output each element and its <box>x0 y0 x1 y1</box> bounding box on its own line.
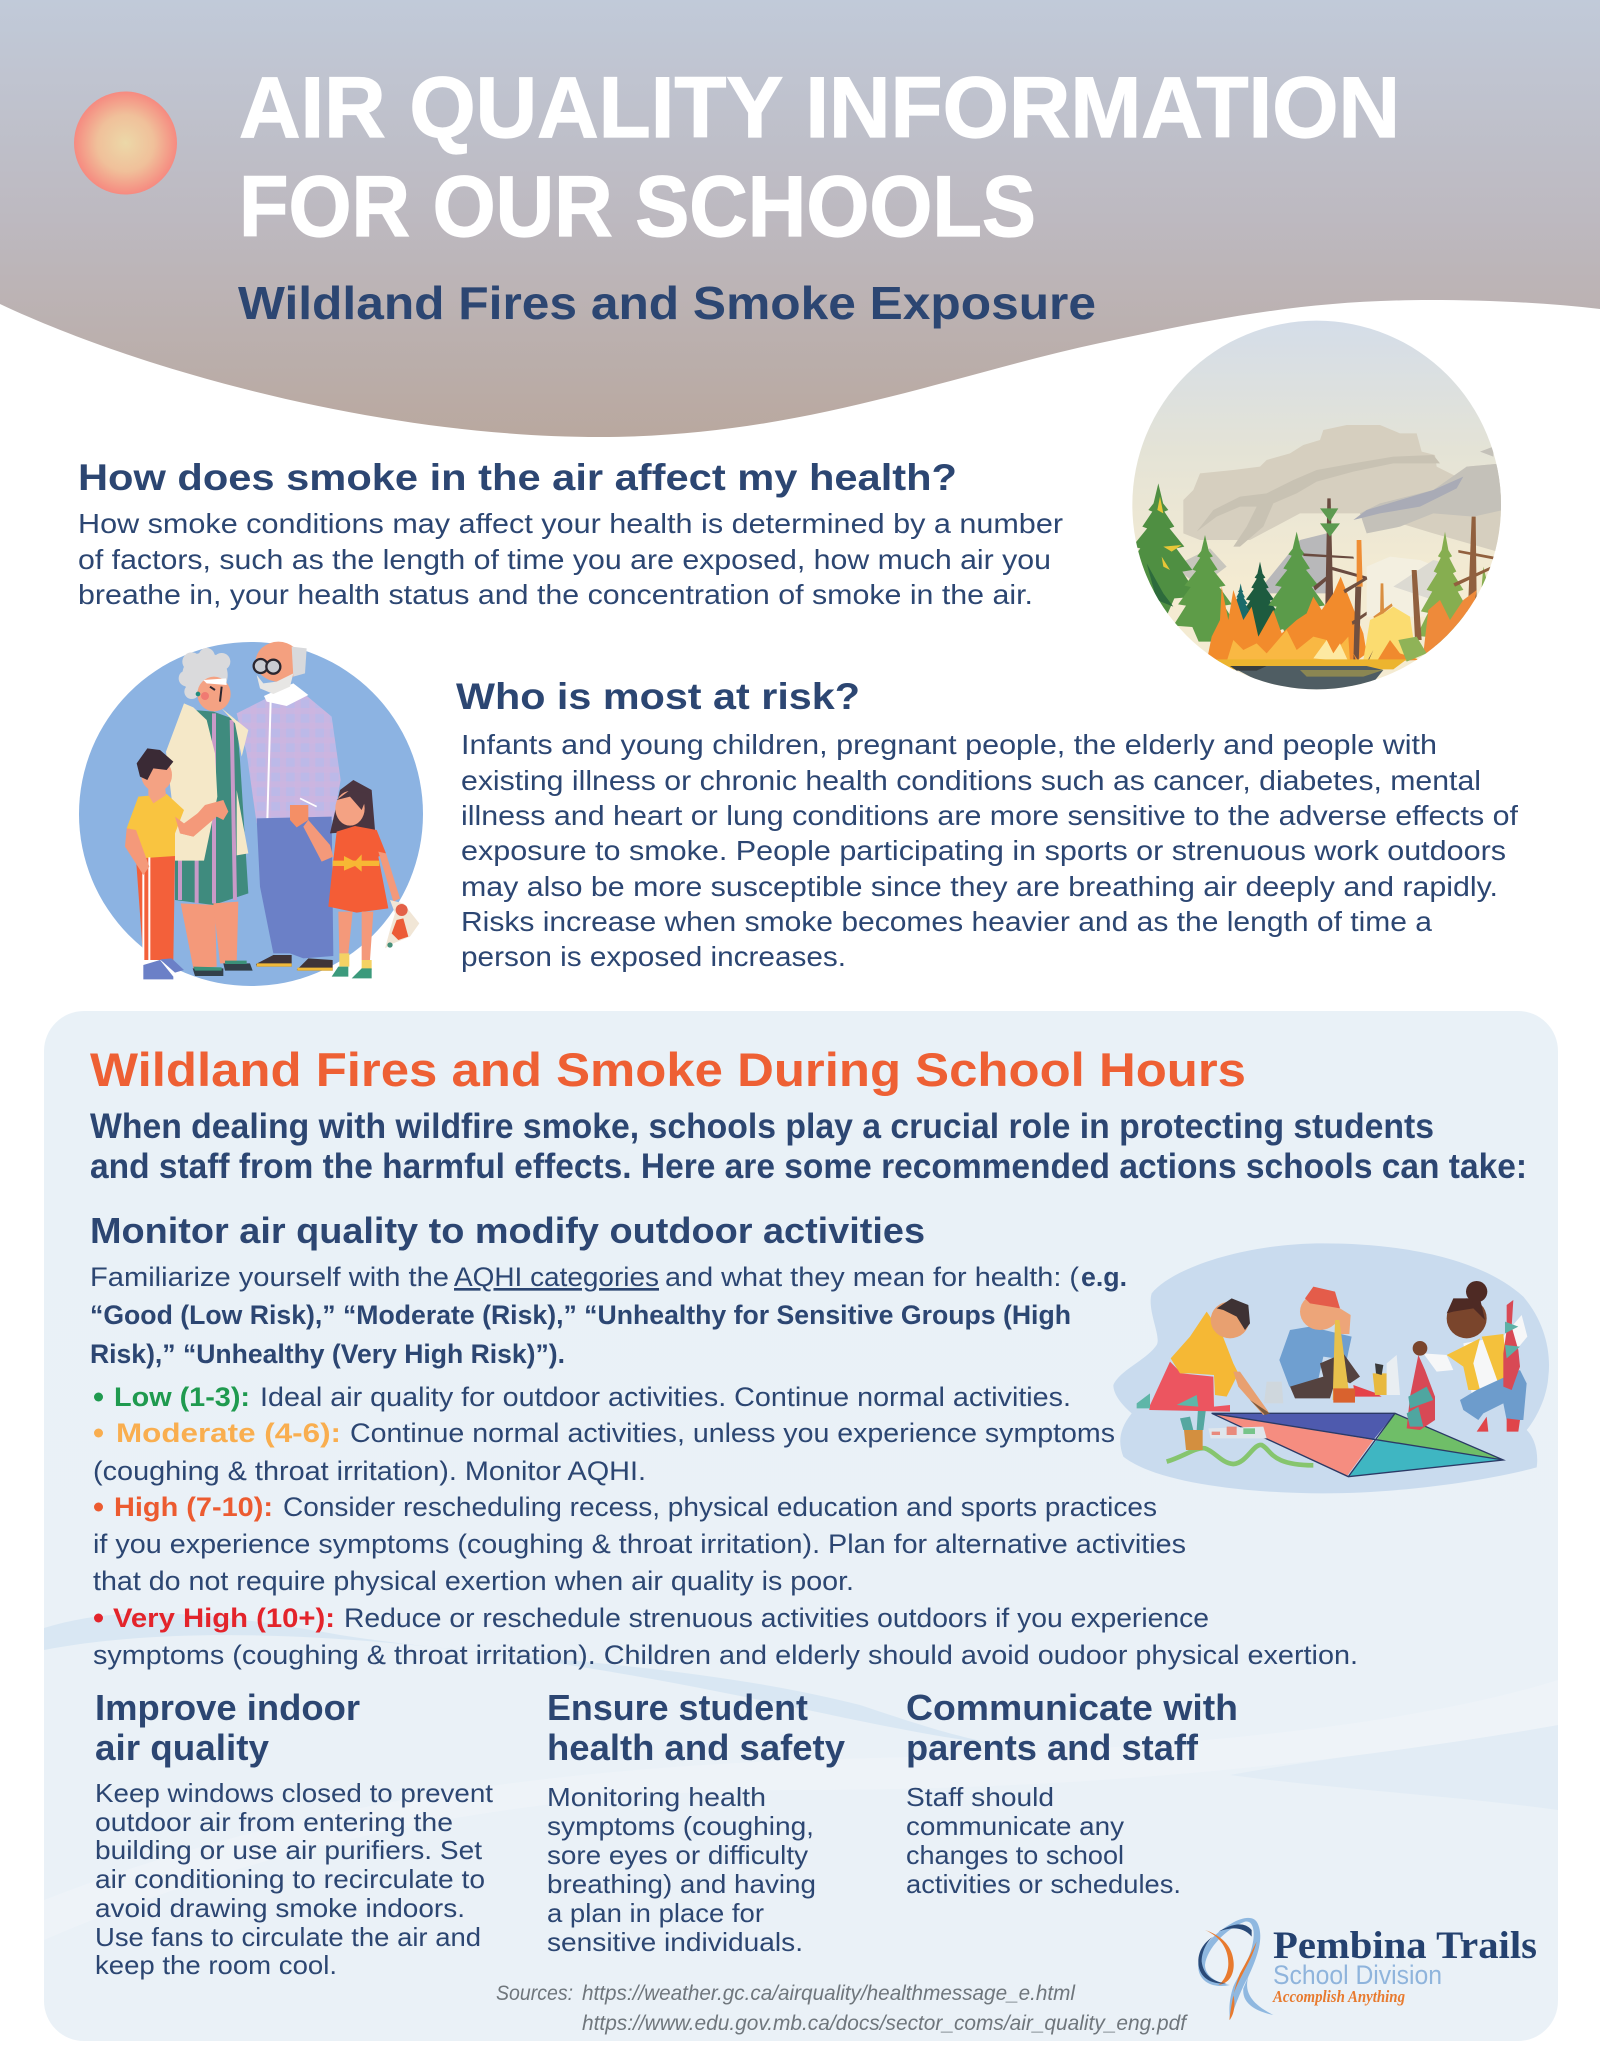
text block: who is most at risk: illness and heart or lung conditions are more sensitive to the adverse effects of <box>461 800 1518 831</box>
text block: how smoke affects health: of factors, such as the length of time you are exposed, how much air you <box>78 544 1051 575</box>
AQHI intro text <box>90 1262 1127 1369</box>
category: high: High (7-10): <box>114 1492 273 1522</box>
ground <box>1215 659 1407 669</box>
logo: Pembina Trails School Division: School Division <box>1273 1960 1442 1990</box>
grandfather <box>237 642 341 971</box>
family background circle <box>79 642 423 986</box>
dead trees <box>1303 498 1367 607</box>
logo: Pembina Trails School Division <box>1198 1918 1537 2020</box>
panel intro: and staff from the harmful effects. Here are some recommended actions schools can take: <box>90 1147 1527 1186</box>
child in yellow <box>1137 1298 1270 1415</box>
category: very high <box>93 1603 1358 1670</box>
illustration: family of four <box>79 642 423 986</box>
burning trunk <box>1357 540 1363 587</box>
child in white with paper chains <box>1407 1281 1527 1432</box>
text block: how smoke affects health: breathe in, your health status and the concentration of smoke in the air. <box>78 579 1033 610</box>
column: ensure student health and safety: Monitoring health <box>547 1782 766 1812</box>
panel intro: When dealing with wildfire smoke, schools play a crucial role in protecting students <box>90 1107 1434 1146</box>
AQHI intro text: and what they mean for health: ( <box>665 1262 1079 1292</box>
AQHI intro text: Risk),” “Unhealthy (Very High Risk)”). <box>90 1339 565 1369</box>
column: ensure student health and safety: health and safety <box>547 1727 845 1768</box>
column: communicate with parents and staff: activities or schedules. <box>906 1869 1181 1899</box>
category: moderate: Continue normal activities, unless you experience symptoms <box>350 1418 1115 1448</box>
blob background <box>1113 1243 1549 1493</box>
category: high <box>93 1492 1186 1596</box>
column: improve indoor air quality <box>95 1687 494 1980</box>
category: very high: Very High (10+): <box>113 1603 335 1633</box>
category: very high: Reduce or reschedule strenuous activities outdoors if you experience <box>344 1603 1209 1633</box>
sources: Sources: <box>496 1982 573 2005</box>
jar and bottles <box>1264 1355 1400 1403</box>
grandmother <box>166 648 253 976</box>
column: ensure student health and safety: Ensure student <box>547 1687 808 1728</box>
category: high: Consider rescheduling recess, physical education and sports practices <box>283 1492 1157 1522</box>
column: ensure student health and safety: symptoms (coughing, <box>547 1811 814 1841</box>
column: communicate with parents and staff: communicate any <box>906 1811 1124 1841</box>
heading: how does smoke affect health: How does smoke in the air affect my health? <box>78 457 957 498</box>
text block: who is most at risk: existing illness or chronic health conditions such as cancer, diabetes, mental <box>461 765 1481 796</box>
icon: hazy sun <box>74 92 177 194</box>
kite <box>1212 1413 1503 1477</box>
AQHI intro text: Familiarize yourself with the <box>90 1262 449 1292</box>
AQHI intro text: “Good (Low Risk),” “Moderate (Risk),” “Unhealthy for Sensitive Groups (High <box>90 1300 1071 1330</box>
category: moderate: (coughing & throat irritation). Monitor AQHI. <box>93 1456 646 1486</box>
text block: who is most at risk: may also be more susceptible since they are breathing air deeply and rapidly. <box>461 871 1498 902</box>
category: moderate <box>93 1418 1115 1486</box>
text block: who is most at risk: Infants and young children, pregnant people, the elderly and people with <box>461 729 1437 760</box>
title: AIR QUALITY INFORMATION <box>239 60 1400 156</box>
column: ensure student health and safety: a plan in place for <box>547 1898 764 1928</box>
header banner <box>0 0 1600 437</box>
column: improve indoor air quality: Use fans to circulate the air and <box>95 1922 481 1952</box>
logo: Pembina Trails School Division: Accomplish Anything <box>1272 1987 1405 2006</box>
flames <box>1207 577 1367 663</box>
logo ribbon mark <box>1198 1918 1273 2020</box>
column: communicate with parents and staff: Communicate with <box>906 1687 1238 1728</box>
category: high: if you experience symptoms (coughing & throat irritation). Plan for alternative activities <box>93 1529 1186 1559</box>
panel: wildland fires and smoke during school hours <box>44 1011 1558 2041</box>
column: improve indoor air quality: building or use air purifiers. Set <box>95 1835 483 1865</box>
heading: who is most at risk: Who is most at risk? <box>456 676 860 717</box>
illustration: forest fire <box>1118 320 1507 693</box>
text block: who is most at risk <box>461 729 1518 972</box>
toy doll <box>385 900 419 948</box>
text block: how smoke affects health: How smoke conditions may affect your health is determined by a number <box>78 508 1063 539</box>
category: moderate: Moderate (4-6): <box>116 1418 341 1448</box>
column: communicate with parents and staff: parents and staff <box>906 1727 1199 1768</box>
heading: monitor air quality: Monitor air quality to modify outdoor activities <box>90 1210 925 1251</box>
column: improve indoor air quality: air quality <box>95 1727 269 1768</box>
panel heading: Wildland Fires and Smoke During School Hours <box>90 1043 1246 1096</box>
sources <box>496 1982 1188 2035</box>
text block: who is most at risk: person is exposed increases. <box>461 941 846 972</box>
panel intro <box>90 1107 1527 1186</box>
AQHI intro text: e.g. <box>1081 1262 1127 1292</box>
text block: how smoke affects health <box>78 508 1063 610</box>
column: ensure student health and safety: sore eyes or difficulty <box>547 1840 808 1870</box>
column: ensure student health and safety: breathing) and having <box>547 1869 816 1899</box>
column: improve indoor air quality: keep the room cool. <box>95 1950 337 1980</box>
title: FOR OUR SCHOOLS <box>239 159 1036 255</box>
sources: https://weather.gc.ca/airquality/healthmessage_e.html <box>582 1982 1076 2005</box>
column: communicate with parents and staff: changes to school <box>906 1840 1124 1870</box>
girl <box>303 780 400 978</box>
column: improve indoor air quality: Improve indoor <box>95 1687 360 1728</box>
title <box>239 60 1400 255</box>
column: improve indoor air quality: outdoor air from entering the <box>95 1807 453 1837</box>
text block: who is most at risk: Risks increase when smoke becomes heavier and as the length of time a <box>461 906 1432 937</box>
column: communicate with parents and staff <box>906 1687 1238 1899</box>
logo: Pembina Trails School Division: Pembina Trails <box>1273 1924 1537 1967</box>
illustration: children painting a kite <box>1113 1243 1549 1493</box>
AQHI intro text: AQHI categories <box>454 1262 659 1292</box>
child in blue <box>1279 1287 1382 1403</box>
column: improve indoor air quality: Keep windows closed to prevent <box>95 1778 494 1808</box>
column: communicate with parents and staff: Staff should <box>906 1782 1054 1812</box>
boy <box>125 748 217 979</box>
column: improve indoor air quality: avoid drawing smoke indoors. <box>95 1893 465 1923</box>
category: low: Ideal air quality for outdoor activities. Continue normal activities. <box>260 1382 1071 1412</box>
column: ensure student health and safety: sensitive individuals. <box>547 1927 803 1957</box>
category: high: that do not require physical exertion when air quality is poor. <box>93 1566 854 1596</box>
subtitle: Wildland Fires and Smoke Exposure <box>238 277 1096 329</box>
category: low: Low (1-3): <box>114 1382 250 1412</box>
ribbon and paints <box>1167 1403 1313 1465</box>
category: very high: symptoms (coughing & throat irritation). Children and elderly should avoid oudoor physical exertion. <box>93 1640 1358 1670</box>
column: ensure student health and safety <box>547 1687 845 1957</box>
pines <box>1136 484 1192 614</box>
text block: who is most at risk: exposure to smoke. People participating in sports or strenuous work outdoors <box>461 835 1506 866</box>
column: improve indoor air quality: air conditioning to recirculate to <box>95 1864 485 1894</box>
sources: https://www.edu.gov.mb.ca/docs/sector_coms/air_quality_eng.pdf <box>582 2012 1188 2035</box>
